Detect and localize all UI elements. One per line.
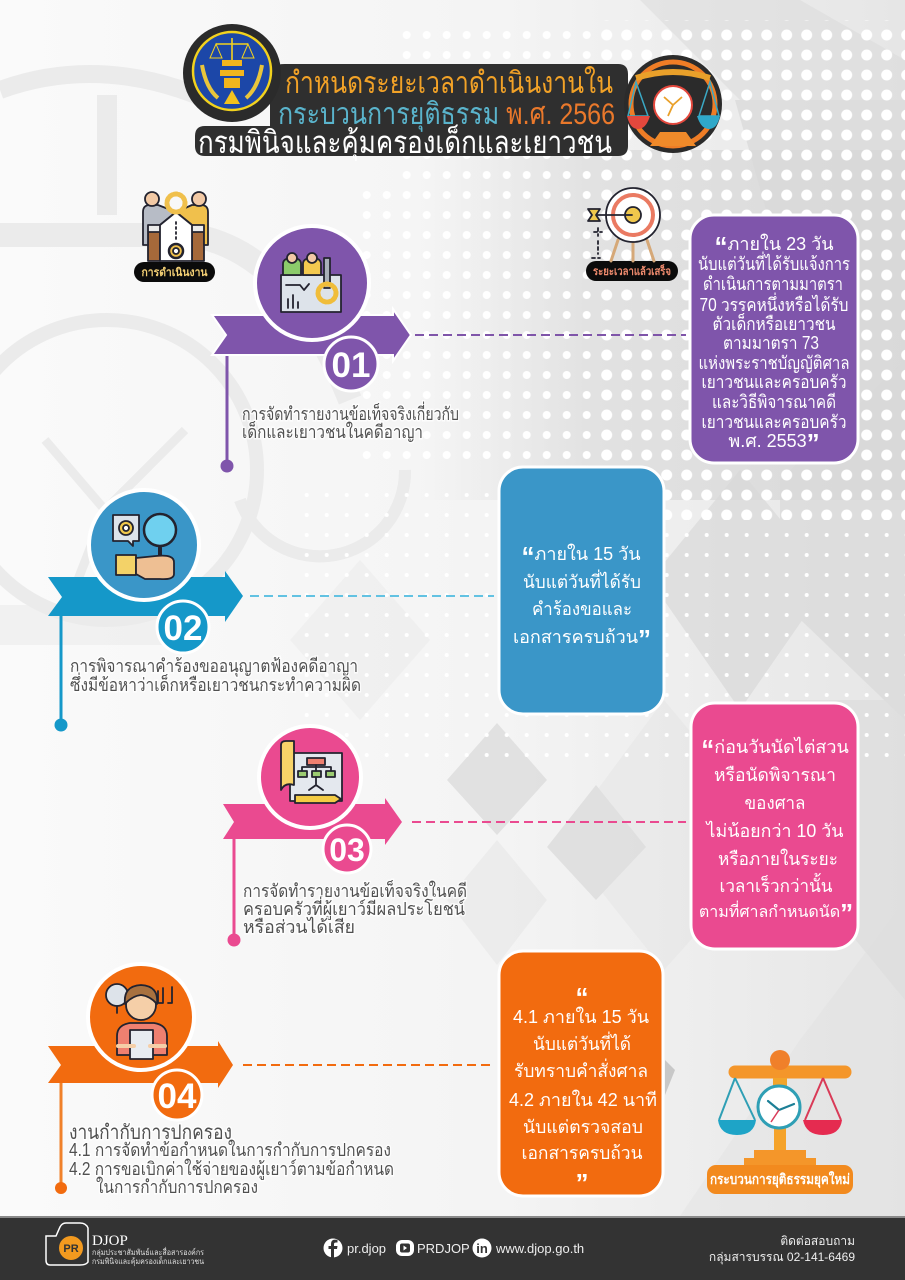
footer <box>0 1216 905 1280</box>
step 3 number badge <box>323 825 371 873</box>
time card 4 <box>499 951 663 1198</box>
modern justice scales emblem <box>718 1050 845 1166</box>
step 1 description: เด็กและเยาวชนในคดีอาญา <box>242 420 423 442</box>
step 2 group <box>48 490 361 732</box>
step 3 circle icon <box>259 726 361 828</box>
time card 1: พ.ศ. 2553 <box>728 431 807 451</box>
time card 3: ก่อนวันนัดไต่สวน <box>714 736 849 757</box>
step 4 description: 4.2 การขอเบิกค่าใช้จ่ายของผู้เยาว์ตามข้อกำหนด <box>69 1158 394 1180</box>
step 4 description: งานกำกับการปกครอง <box>69 1122 232 1144</box>
step 4 number badge: 04 <box>158 1077 197 1116</box>
time card 1: และวิธีพิจารณาคดี <box>712 392 836 412</box>
linkedin link: www.djop.go.th <box>495 1241 584 1256</box>
step 3 description: การจัดทำรายงานข้อเท็จจริงในคดี <box>243 879 467 901</box>
time card 3: ตามที่ศาลกำหนดนัด <box>699 904 840 921</box>
time card 3 <box>691 703 858 949</box>
column icon: completion time <box>586 188 678 281</box>
title plaque: กำหนดระยะเวลาดำเนินงานใน <box>285 66 613 100</box>
dashed connector 3 <box>412 821 686 823</box>
step 1 description: การจัดทำรายงานข้อเท็จจริงเกี่ยวกับ <box>242 401 459 424</box>
step 3 dot <box>228 934 240 946</box>
contact: ติดต่อสอบถาม <box>780 1234 855 1248</box>
column icon: completion time: ระยะเวลาแล้วเสร็จ <box>593 264 671 278</box>
footer logo: DJOP <box>92 1233 128 1249</box>
step 4 dot <box>55 1182 67 1194</box>
modern justice label: กระบวนการยุติธรรมยุคใหม่ <box>710 1170 850 1188</box>
step 4 description: ในการกำกับการปกครอง <box>96 1176 258 1197</box>
time card 2: นับแต่วันที่ได้รับ <box>523 569 641 592</box>
time card 3: หรือนัดพิจารณา <box>714 765 836 785</box>
time card 4: 4.2 ภายใน 42 นาที <box>509 1089 657 1110</box>
time card 1: “ <box>714 231 727 261</box>
time card 2: เอกสารครบถ้วน <box>513 627 638 647</box>
time card 2: “ <box>521 541 534 571</box>
youtube link <box>396 1240 470 1256</box>
step 3 description: หรือส่วนได้เสีย <box>243 916 355 937</box>
step 2 circle icon <box>89 490 199 600</box>
time card 1: ภายใน 23 วัน <box>727 233 834 254</box>
time card 3: หรือภายในระยะ <box>718 848 838 869</box>
modern justice label <box>707 1165 853 1194</box>
step 1 circle icon <box>255 226 369 340</box>
step 1 dot <box>220 460 234 472</box>
linkedin link <box>472 1238 584 1258</box>
step 4 ribbon arrow <box>48 1041 233 1088</box>
time card 3: ไม่น้อยกว่า 10 วัน <box>705 820 844 841</box>
step 2 number badge <box>157 601 209 653</box>
time card 4: นับแต่ตรวจสอบ <box>523 1117 643 1137</box>
column icon: operations: การดำเนินงาน <box>142 266 208 279</box>
step 1 group <box>212 226 459 472</box>
time card 2: ภายใน 15 วัน <box>534 543 641 564</box>
time card 3: “ <box>701 734 714 764</box>
step 2 description: การพิจารณาคำร้องขออนุญาตฟ้องคดีอาญา <box>70 656 358 677</box>
time card 1: เยาวชนและครอบครัว <box>702 412 846 432</box>
footer logo <box>46 1223 205 1266</box>
step 2 stem <box>60 616 62 725</box>
time card 1: ตามมาตรา 73 <box>723 333 819 353</box>
step 3 description <box>243 879 467 937</box>
time card 1: ” <box>807 428 820 458</box>
time card 1 <box>690 215 858 463</box>
time card 4: เอกสารครบถ้วน <box>522 1143 642 1163</box>
step 3 stem <box>232 839 236 940</box>
time card 3: ” <box>840 898 853 928</box>
step 4 description: 4.1 การจัดทำข้อกำหนดในการกำกับการปกครอง <box>69 1139 391 1160</box>
title emblem: scales and clock <box>624 55 722 153</box>
step 3 ribbon arrow <box>223 798 402 845</box>
time card 1: ตัวเด็กหรือเยาวชน <box>712 312 836 334</box>
step 1 number badge: 01 <box>332 346 370 385</box>
step 2 ribbon arrow <box>48 571 243 622</box>
step 2 number badge: 02 <box>164 609 202 648</box>
time card 1: แห่งพระราชบัญญัติศาล <box>698 353 850 373</box>
step 1 description <box>242 401 459 442</box>
time card 2: คำร้องขอและ <box>532 599 632 619</box>
title emblem: department seal <box>183 24 281 122</box>
step 1 stem <box>226 356 228 466</box>
step 4 circle icon <box>88 964 194 1070</box>
step 4 group <box>48 964 394 1197</box>
step 2 description <box>70 656 361 695</box>
time card 4: “ <box>576 982 588 1012</box>
time card 1: เยาวชนและครอบครัว <box>702 372 846 392</box>
step 1 ribbon arrow <box>212 309 411 361</box>
time card 3: ของศาล <box>744 793 806 813</box>
time card 1: นับแต่วันที่ได้รับแจ้งการ <box>698 251 850 274</box>
time card 4: รับทราบคำสั่งศาล <box>514 1058 648 1081</box>
dashed connector 4 <box>243 1064 495 1066</box>
contact <box>709 1234 855 1265</box>
time card 1: ดำเนินการตามมาตรา <box>703 274 843 294</box>
time card 2: ” <box>638 624 651 654</box>
step 2 description: ซึ่งมีข้อหาว่าเด็กหรือเยาวชนกระทำความผิด <box>70 672 361 695</box>
step 3 number badge: 03 <box>329 832 365 868</box>
step 3 group <box>223 726 467 946</box>
footer logo: กรมพินิจและคุ้มครองเด็กและเยาวชน <box>92 1256 204 1266</box>
step 2 dot <box>54 718 68 732</box>
time card 3: เวลาเร็วกว่านั้น <box>720 873 832 896</box>
linkedin link: in <box>476 1241 488 1256</box>
dashed connector 1 <box>415 334 686 336</box>
footer logo: PR <box>63 1243 79 1255</box>
contact: กลุ่มสารบรรณ 02-141-6469 <box>709 1250 855 1265</box>
title plaque: กรมพินิจและคุ้มครองเด็กและเยาวชน <box>198 124 612 162</box>
footer logo: กลุ่มประชาสัมพันธ์และสื่อสารองค์กร <box>92 1246 205 1257</box>
step 4 stem <box>60 1083 62 1188</box>
step 1 number badge <box>324 337 378 391</box>
time card 1: 70 วรรคหนึ่งหรือได้รับ <box>700 292 848 315</box>
column icon: operations <box>134 192 215 282</box>
time card 2 <box>499 467 664 714</box>
time card 4: นับแต่วันที่ได้ <box>533 1031 631 1054</box>
title plaque <box>195 64 628 162</box>
step 4 number badge <box>152 1070 202 1120</box>
facebook link: pr.djop <box>347 1241 386 1256</box>
time card 4: ” <box>576 1168 588 1198</box>
step 4 description <box>69 1122 394 1197</box>
youtube link: PRDJOP <box>417 1241 470 1256</box>
title plaque: กระบวนการยุติธรรม พ.ศ. 2566 <box>278 98 615 133</box>
dashed connector 2 <box>250 595 494 597</box>
step 3 description: ครอบครัวที่ผู้เยาว์มีผลประโยชน์ <box>243 896 465 920</box>
facebook link <box>324 1238 386 1258</box>
time card 4: 4.1 ภายใน 15 วัน <box>513 1006 649 1027</box>
